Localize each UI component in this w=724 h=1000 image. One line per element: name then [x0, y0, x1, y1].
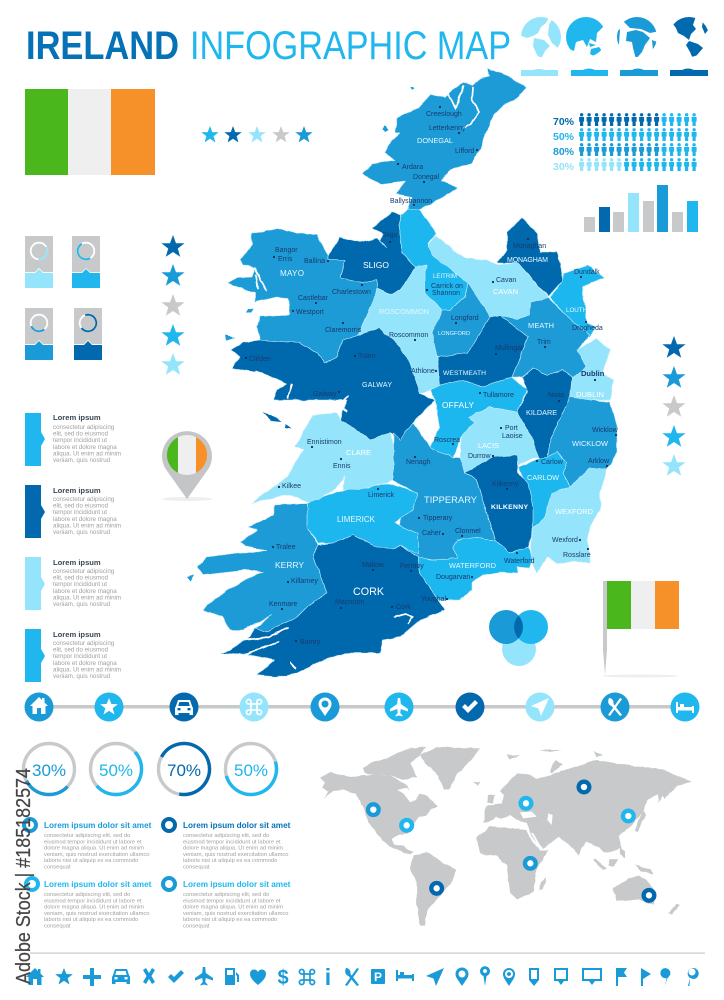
block 4: laboris nisi ut aliquip ex ea commodo: [183, 917, 277, 923]
city names: Bantry: [300, 639, 321, 646]
list item 1: consectetur adipiscing: [53, 424, 115, 431]
list item 4: [25, 629, 121, 682]
continents: [320, 747, 692, 926]
city names: Drogheda: [572, 325, 603, 332]
ring 50% right: [220, 738, 282, 800]
row 70%: 70%: [553, 116, 575, 128]
county labels: SLIGO: [363, 260, 389, 270]
icon: car: [112, 969, 130, 984]
bar chart: [584, 185, 698, 232]
block 2: [163, 819, 291, 870]
city names: Castlebar: [298, 295, 329, 302]
icon: plane: [195, 967, 213, 986]
icon: info: i: [325, 964, 331, 990]
city names: Clifden: [249, 356, 271, 363]
county labels: [275, 136, 608, 598]
county: Kilkenny: [465, 455, 533, 553]
county labels: MEATH: [528, 321, 554, 330]
county shapes: [187, 68, 617, 677]
list item 1: [25, 413, 121, 466]
city names: Athlone: [411, 368, 435, 375]
county labels: LACIS: [478, 441, 499, 450]
flag of Ireland: [25, 89, 155, 175]
city names: Dundalk: [574, 269, 600, 276]
city names: Wexford: [552, 537, 578, 544]
icon: home: [26, 968, 44, 985]
icon: send: [526, 692, 554, 722]
county: Monaghan: [497, 217, 563, 297]
list item 2: consectetur adipiscing: [53, 496, 115, 503]
county: Carlow: [518, 452, 570, 528]
list item 1: veniam, quis nostrud: [53, 457, 111, 464]
list item 2: Lorem ipsum: [53, 486, 101, 495]
icon: check: [456, 692, 484, 722]
icon: bed: [396, 970, 414, 981]
list item 4: Lorem ipsum: [53, 630, 101, 639]
county: Cork: [220, 535, 445, 677]
city names: Ardara: [402, 164, 423, 171]
globe bases: [521, 68, 708, 76]
left column of stars: [161, 235, 185, 375]
county: Dublin: [570, 338, 613, 400]
block 4: eiusmod tempor incididunt ut labore et: [183, 898, 281, 904]
text list with side tabs: [25, 413, 121, 682]
icon: plus: [83, 968, 101, 986]
city names: Erris: [278, 256, 293, 263]
row 30%: [553, 158, 698, 173]
list item 3: veniam, quis nostrud: [53, 601, 111, 608]
block 3: [26, 878, 152, 930]
row 80%: [553, 143, 698, 158]
city names: Letterkenny: [429, 125, 466, 132]
county: Kildare: [517, 368, 572, 460]
city names: Creeslough: [426, 111, 462, 118]
block 2: laboris nisi ut aliquip ex ea commodo: [183, 858, 277, 864]
block 1: veniam, quis nostrud exercitation ullamco: [44, 852, 149, 858]
county: Tipperary: [393, 423, 495, 560]
row 80%: 80%: [553, 146, 575, 158]
globes: [519, 13, 709, 76]
city names: Ballyshannon: [390, 198, 432, 205]
list item 2: veniam, quis nostrud: [53, 529, 111, 536]
county: Westmeath: [437, 315, 528, 387]
icon: cross: [143, 968, 155, 984]
list item 1: labore et dolore magna: [53, 444, 117, 451]
icon: command: [240, 692, 268, 722]
globe: Asia: [566, 17, 604, 56]
lower text blocks: [24, 819, 291, 930]
block 2: consectetur adipiscing elit, sed do: [183, 833, 269, 839]
county labels: CARLOW: [527, 473, 559, 482]
list item 4: elit, sed do eiusmod: [53, 647, 109, 654]
county labels: TIPPERARY: [424, 495, 477, 505]
block 4: dolore magna aliqua. Ut enim ad minim: [183, 905, 283, 911]
city names: Kilkenny: [492, 481, 519, 488]
city names: Limerick: [368, 492, 395, 499]
block 4: consequat: [183, 924, 210, 930]
list item 3: [25, 557, 121, 610]
list item 3: labore et dolore magna: [53, 588, 117, 595]
block 1: consectetur adipiscing elit, sed do: [44, 833, 130, 839]
block 3: consequat: [44, 924, 71, 930]
list item 2: tempor incididunt ut: [53, 509, 107, 516]
county labels: DONEGAL: [417, 136, 453, 145]
row 70%: [553, 113, 698, 128]
county: Wexford: [530, 468, 607, 573]
county labels: ROSCOMMON: [379, 307, 429, 316]
venn diagram: [489, 610, 548, 666]
city names: Wicklow: [592, 427, 619, 434]
city names: Clonmel: [455, 528, 481, 535]
block 1: Lorem ipsum dolor sit amet: [44, 821, 152, 830]
city names: Claremorris: [325, 327, 362, 334]
list item 4: veniam, quis nostrud: [53, 673, 111, 680]
list item 4: labore et dolore magna: [53, 660, 117, 667]
inland seas: [393, 788, 553, 848]
city names: Tullamore: [483, 392, 514, 399]
city names: Macroom: [335, 599, 364, 606]
county: Meath: [500, 298, 590, 378]
ring 30%: 30%: [32, 761, 66, 780]
globe: Americas: [673, 17, 708, 57]
list item 1: elit, sed do eiusmod: [53, 431, 109, 438]
city names: Durrow: [468, 453, 492, 460]
list item 3: Lorem ipsum: [53, 558, 101, 567]
county labels: WATERFORD: [449, 561, 496, 570]
title: INFOGRAPHIC MAP: [190, 24, 511, 68]
block 1: dolore magna aliqua. Ut enim ad minim: [44, 846, 144, 852]
city names: Shannon: [432, 290, 460, 297]
city names: Ennis: [333, 463, 351, 470]
icon: pin: [310, 692, 340, 722]
icon: parking: [371, 969, 385, 984]
icon: loupe pin: [688, 968, 699, 986]
county: Longford: [432, 283, 490, 357]
icon: parking: P: [374, 970, 382, 984]
bottom icon strip: [26, 952, 705, 990]
block 1: eiusmod tempor incididunt ut labore et: [44, 839, 142, 845]
city names: Dougarvan: [436, 574, 470, 581]
icon: speech wide: [582, 968, 602, 985]
block 2: veniam, quis nostrud exercitation ullamco: [183, 852, 288, 858]
list item 4: tempor incididunt ut: [53, 653, 107, 660]
block 2: consequat: [183, 864, 210, 870]
icon: dollar: $: [277, 967, 289, 989]
list item 2: aliqua. Ut enim ad minim: [53, 522, 121, 529]
vertical stock credit: Adobe Stock | #185182574: [13, 768, 35, 984]
globe: Africa: [617, 17, 656, 57]
icon: bed: [670, 692, 700, 722]
block 4: [163, 878, 291, 930]
county labels: CORK: [353, 586, 385, 598]
county: Roscommon: [358, 265, 442, 393]
county labels: LIMERICK: [337, 515, 376, 524]
county labels: MAYO: [280, 269, 304, 278]
badges with progress rings: [25, 236, 102, 360]
city names: Carrick on: [431, 283, 463, 290]
people percentage chart: [553, 113, 698, 173]
block 1: consequat: [44, 864, 71, 870]
block 2: Lorem ipsum dolor sit amet: [183, 821, 291, 830]
icon: plane: [384, 692, 414, 722]
city names: Naas: [548, 392, 565, 399]
city names: Waterford: [504, 558, 535, 565]
icon: speech square: [554, 968, 568, 985]
county: Wicklow: [547, 397, 617, 487]
row 50%: [553, 128, 698, 143]
block 3: dolore magna aliqua. Ut enim ad minim: [44, 905, 144, 911]
county: Clare: [252, 413, 393, 503]
block 4: veniam, quis nostrud exercitation ullamco: [183, 911, 288, 917]
list item 3: aliqua. Ut enim ad minim: [53, 594, 121, 601]
title: IRELAND: [26, 24, 179, 68]
county: Mayo: [227, 228, 377, 363]
row 30%: 30%: [553, 161, 575, 173]
list item 1: tempor incididunt ut: [53, 437, 107, 444]
icon: fuel pump: [225, 968, 239, 985]
county: Limerick: [307, 483, 418, 554]
city names: Laoise: [502, 433, 523, 440]
icon: heart: [250, 970, 266, 985]
city names: Donegal: [413, 174, 440, 181]
city names: Tuam: [358, 353, 376, 360]
list item 3: tempor incididunt ut: [53, 581, 107, 588]
city dots: [246, 107, 616, 641]
city names: Roscrea: [434, 437, 460, 444]
county labels: WICKLOW: [572, 439, 608, 448]
city names: Lifford: [455, 148, 474, 155]
county labels: KILKENNY: [491, 504, 528, 511]
icon: small pin: [480, 966, 490, 986]
flag on pole: [602, 581, 679, 678]
city names: Sligo: [382, 232, 398, 239]
city names: Bangor: [275, 247, 298, 254]
city names: Trim: [537, 339, 551, 346]
county labels: KILDARE: [526, 408, 557, 417]
map of Ireland: [187, 68, 619, 677]
city names: Longford: [451, 315, 479, 322]
city names: Ennistimon: [307, 439, 342, 446]
city names: Youghal: [421, 596, 446, 603]
city names: Carlow: [541, 459, 564, 466]
county: Laois: [460, 407, 540, 472]
county labels: WEXFORD: [555, 507, 593, 516]
city names: Port: [505, 425, 518, 432]
county labels: MONAGHAM: [507, 257, 548, 264]
ring 50% left: [80, 733, 152, 805]
list item 4: aliqua. Ut enim ad minim: [53, 666, 121, 673]
county labels: OFFALY: [442, 401, 475, 410]
ring 50% left: 50%: [99, 761, 133, 780]
city names: Mallow: [362, 562, 385, 569]
county labels: GALWAY: [362, 382, 392, 389]
county: Kerry: [197, 503, 327, 632]
icon: pin: [456, 968, 468, 986]
city names: Tralee: [276, 544, 296, 551]
list item 2: [25, 485, 121, 538]
icon: star: [55, 968, 73, 984]
map pin with flag: [162, 431, 212, 501]
icon: check: [168, 970, 184, 983]
city names: Arklow: [588, 458, 610, 465]
block 1: [24, 819, 152, 870]
right column of stars: [662, 336, 686, 476]
star rating row: [201, 126, 313, 142]
block 3: Lorem ipsum dolor sit amet: [44, 880, 152, 889]
badge bright: [72, 236, 100, 288]
icon: cutlery: [345, 968, 359, 986]
county labels: WESTMEATH: [443, 370, 486, 377]
county labels: KERRY: [275, 560, 304, 570]
block 4: consectetur adipiscing elit, sed do: [183, 892, 269, 898]
city names: Galway: [313, 391, 337, 398]
block 2: eiusmod tempor incididunt ut labore et: [183, 839, 281, 845]
block 4: Lorem ipsum dolor sit amet: [183, 880, 291, 889]
county labels: LONGFORD: [438, 331, 470, 337]
icon: balloon pin: [660, 968, 670, 986]
block 3: veniam, quis nostrud exercitation ullamco: [44, 911, 149, 917]
list item 1: aliqua. Ut enim ad minim: [53, 450, 121, 457]
county labels: LEITRIM: [433, 273, 457, 280]
ring 50% right: 50%: [234, 761, 268, 780]
block 3: consectetur adipiscing elit, sed do: [44, 892, 130, 898]
city names: Westport: [296, 309, 324, 316]
icon: home: [24, 692, 54, 722]
list item 3: elit, sed do eiusmod: [53, 575, 109, 582]
icon: star: [94, 692, 124, 722]
icon: tag pin: [529, 968, 539, 986]
percentage rings: [13, 733, 282, 805]
city names: Kilkee: [282, 483, 301, 490]
city names: Mullingar: [495, 345, 524, 352]
city names: Charlestown: [332, 289, 371, 296]
ring 70%: 70%: [167, 761, 201, 780]
icon: banner flag: [616, 968, 627, 986]
city names: Caher: [422, 530, 442, 537]
city names: Cavan: [496, 277, 516, 284]
location markers: [368, 782, 654, 901]
county labels: DUBLIN: [576, 390, 604, 399]
city names: Kenmare: [269, 601, 298, 608]
badge pale: [25, 236, 53, 288]
list item 3: consectetur adipiscing: [53, 568, 115, 575]
county: Louth: [550, 265, 604, 337]
county labels: CAVAN: [493, 287, 518, 296]
city names: Ballina: [304, 258, 325, 265]
icon: triangle flag: [641, 968, 651, 986]
city names: Killarney: [291, 578, 318, 585]
ring 70%: [149, 734, 219, 804]
city names: Fermoy: [400, 563, 424, 570]
row 50%: 50%: [553, 131, 575, 143]
list item 2: elit, sed do eiusmod: [53, 503, 109, 510]
coastal inlets and islands: [187, 86, 479, 668]
city names: Rosslare: [563, 552, 591, 559]
icon: target pin: [503, 968, 515, 986]
county: Leitrim: [400, 209, 468, 310]
block 2: dolore magna aliqua. Ut enim ad minim: [183, 846, 283, 852]
icon: car: [170, 692, 198, 722]
city names: Nenagh: [406, 459, 431, 466]
block 1: laboris nisi ut aliquip ex ea commodo: [44, 858, 138, 864]
city names: Cork: [396, 604, 411, 611]
world map: [320, 747, 692, 926]
city names: Roscommon: [389, 332, 428, 339]
block 3: eiusmod tempor incididunt ut labore et: [44, 898, 142, 904]
county labels: CLARE: [346, 448, 371, 457]
globe: Atlantic: [521, 17, 561, 57]
badge dark: [74, 308, 102, 360]
county labels: LOUTH: [566, 307, 587, 314]
county: Cavan: [428, 235, 548, 319]
county: Waterford: [418, 538, 533, 600]
county: Offaly: [430, 377, 527, 458]
ring 30%: [13, 733, 85, 805]
city names: Dublin: [581, 369, 605, 378]
icon: command: [299, 969, 315, 985]
icon: cutlery: [600, 692, 630, 722]
icon: send: [426, 968, 444, 986]
timeline of round icons: [24, 692, 700, 722]
list item 1: Lorem ipsum: [53, 413, 101, 422]
county: Donegal: [362, 68, 527, 212]
city names: [249, 111, 619, 646]
title: [26, 24, 511, 68]
badge mid: [25, 308, 53, 360]
list item 2: labore et dolore magna: [53, 516, 117, 523]
list item 4: consectetur adipiscing: [53, 640, 115, 647]
county: Galway: [232, 328, 435, 440]
block 3: laboris nisi ut aliquip ex ea commodo: [44, 917, 138, 923]
county: Sligo: [328, 212, 415, 295]
city names: Tipperary: [423, 515, 453, 522]
city names: Monaghan: [513, 243, 546, 250]
